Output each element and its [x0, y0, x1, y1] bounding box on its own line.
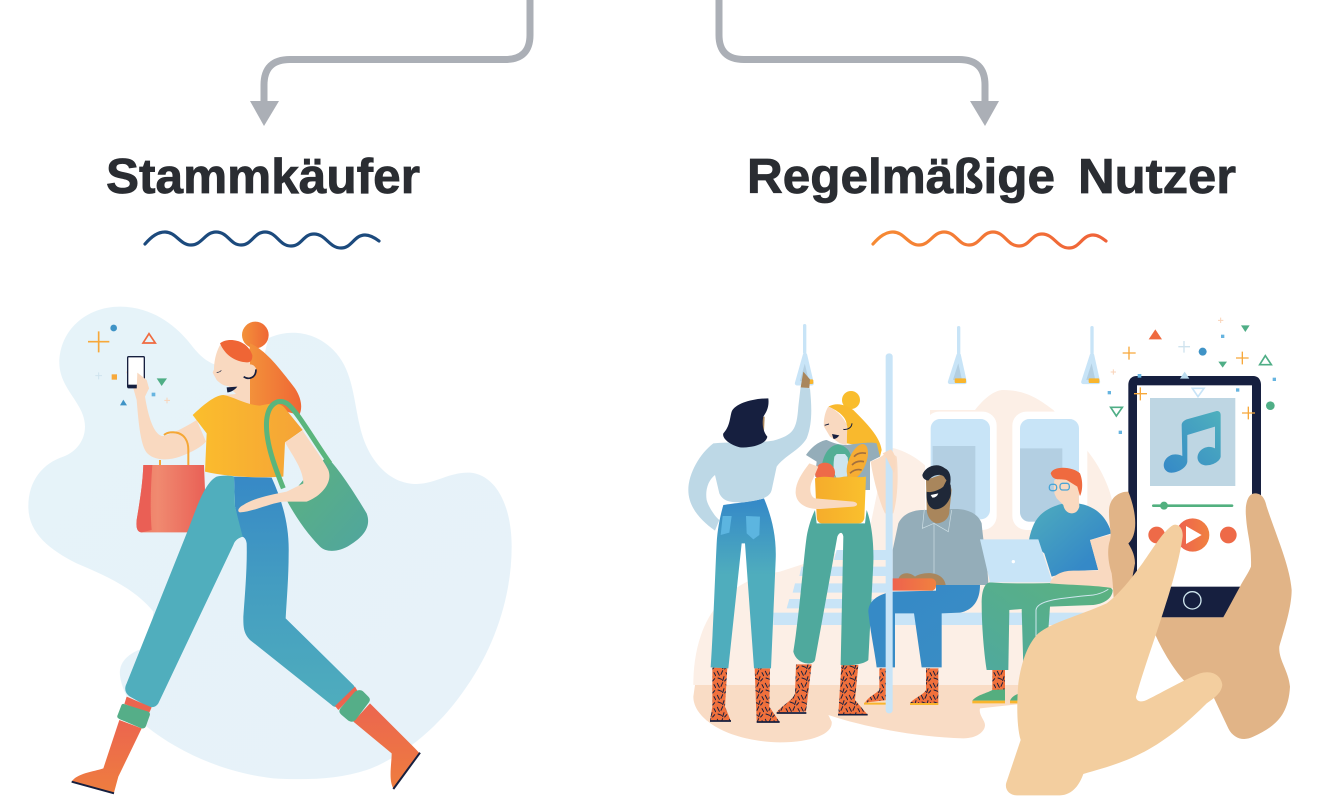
arrow: right connector	[719, 0, 999, 126]
far leg	[234, 477, 355, 707]
train windows	[925, 412, 1087, 530]
smartphone with music player	[1128, 376, 1261, 617]
hand on pole	[883, 449, 896, 473]
player buttons	[1148, 518, 1237, 552]
person: woman from behind	[688, 372, 811, 722]
illustration: commuters in train	[688, 318, 1292, 795]
phone in hand	[128, 357, 149, 395]
person: woman with groceries	[777, 391, 898, 715]
green shoulder bag	[287, 457, 368, 551]
vertical grab pole	[886, 353, 893, 713]
heading: Regelmäßige Nutzer: Regelmäßige	[747, 150, 1055, 204]
hair bun and back hair	[242, 322, 301, 415]
shopping bag handle	[160, 432, 188, 466]
illustration: walking shopper with phone	[28, 307, 512, 793]
front hand pointing	[1006, 525, 1222, 795]
album cover with note	[1150, 398, 1235, 486]
heading: Regelmäßige Nutzer	[747, 150, 1236, 204]
bench	[773, 550, 1117, 625]
rear hand holding phone	[1153, 493, 1292, 739]
sparkles around phone	[88, 325, 170, 405]
left boot and cuff	[72, 697, 152, 793]
wavy underline: right	[873, 232, 1106, 248]
hanging handles	[797, 324, 1099, 384]
yellow T-shirt	[193, 395, 303, 477]
red shopping bag	[136, 465, 207, 532]
person: seated man with laptop	[972, 468, 1113, 702]
home button	[1184, 592, 1201, 609]
near leg	[125, 476, 243, 707]
heading: Stammkäufer: Stammkäufer	[106, 150, 420, 204]
rear hand fingers	[1108, 492, 1135, 603]
arm in pocket	[238, 431, 329, 512]
ear and eye details	[217, 369, 256, 392]
heading: Regelmäßige Nutzer: Nutzer	[1078, 150, 1236, 204]
progress slider	[1152, 502, 1233, 510]
arrow: left connector	[250, 0, 530, 126]
music sparkles	[1108, 318, 1276, 434]
background wall shape	[693, 390, 1113, 685]
right boot and cuff	[335, 687, 420, 789]
face and neck	[213, 345, 256, 406]
hair front	[220, 340, 252, 362]
floor shape	[693, 685, 1027, 742]
background blob	[28, 307, 512, 779]
bag strap	[266, 401, 330, 488]
person: seated man with beard	[864, 465, 988, 704]
wavy underline: left	[145, 232, 379, 248]
raised arm	[126, 372, 206, 459]
